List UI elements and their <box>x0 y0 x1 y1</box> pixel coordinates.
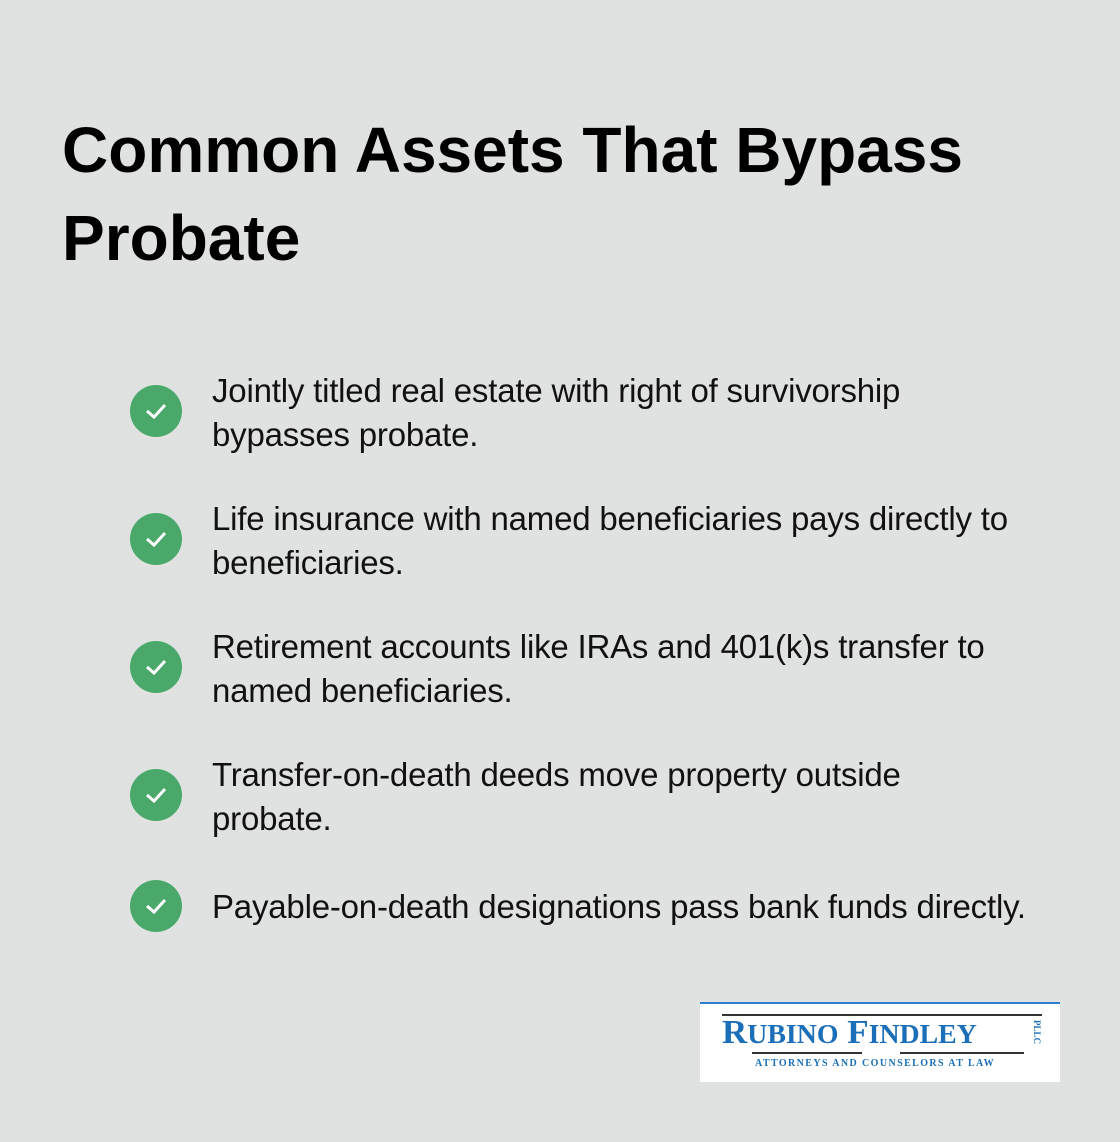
text: Payable-on-death designations pass bank funds directly. <box>212 888 1026 925</box>
title: Probate <box>62 202 300 274</box>
item 3 <box>130 628 985 709</box>
icon: check <box>130 769 182 821</box>
icon: check <box>130 641 182 693</box>
item 2 <box>130 500 1008 581</box>
text: Retirement accounts like IRAs and 401(k)s transfer to named beneficiaries. <box>212 628 985 709</box>
item 4 <box>130 756 901 837</box>
icon: check <box>130 513 182 565</box>
logo: ATTORNEYS AND COUNSELORS AT LAW <box>755 1058 995 1069</box>
title <box>62 114 963 274</box>
text: Life insurance with named beneficiaries pays directly to beneficiaries. <box>212 500 1008 581</box>
item 5 <box>130 880 1026 932</box>
item 1 <box>130 372 900 453</box>
logo: PLLC <box>1032 1020 1042 1044</box>
title: Common Assets That Bypass <box>62 114 963 186</box>
logo: RUBINO FINDLEY <box>722 1014 977 1051</box>
logo <box>700 1002 1060 1082</box>
icon: check <box>130 880 182 932</box>
text: Transfer-on-death deeds move property outside probate. <box>212 756 901 837</box>
text: Jointly titled real estate with right of survivorship bypasses probate. <box>212 372 900 453</box>
icon: check <box>130 385 182 437</box>
